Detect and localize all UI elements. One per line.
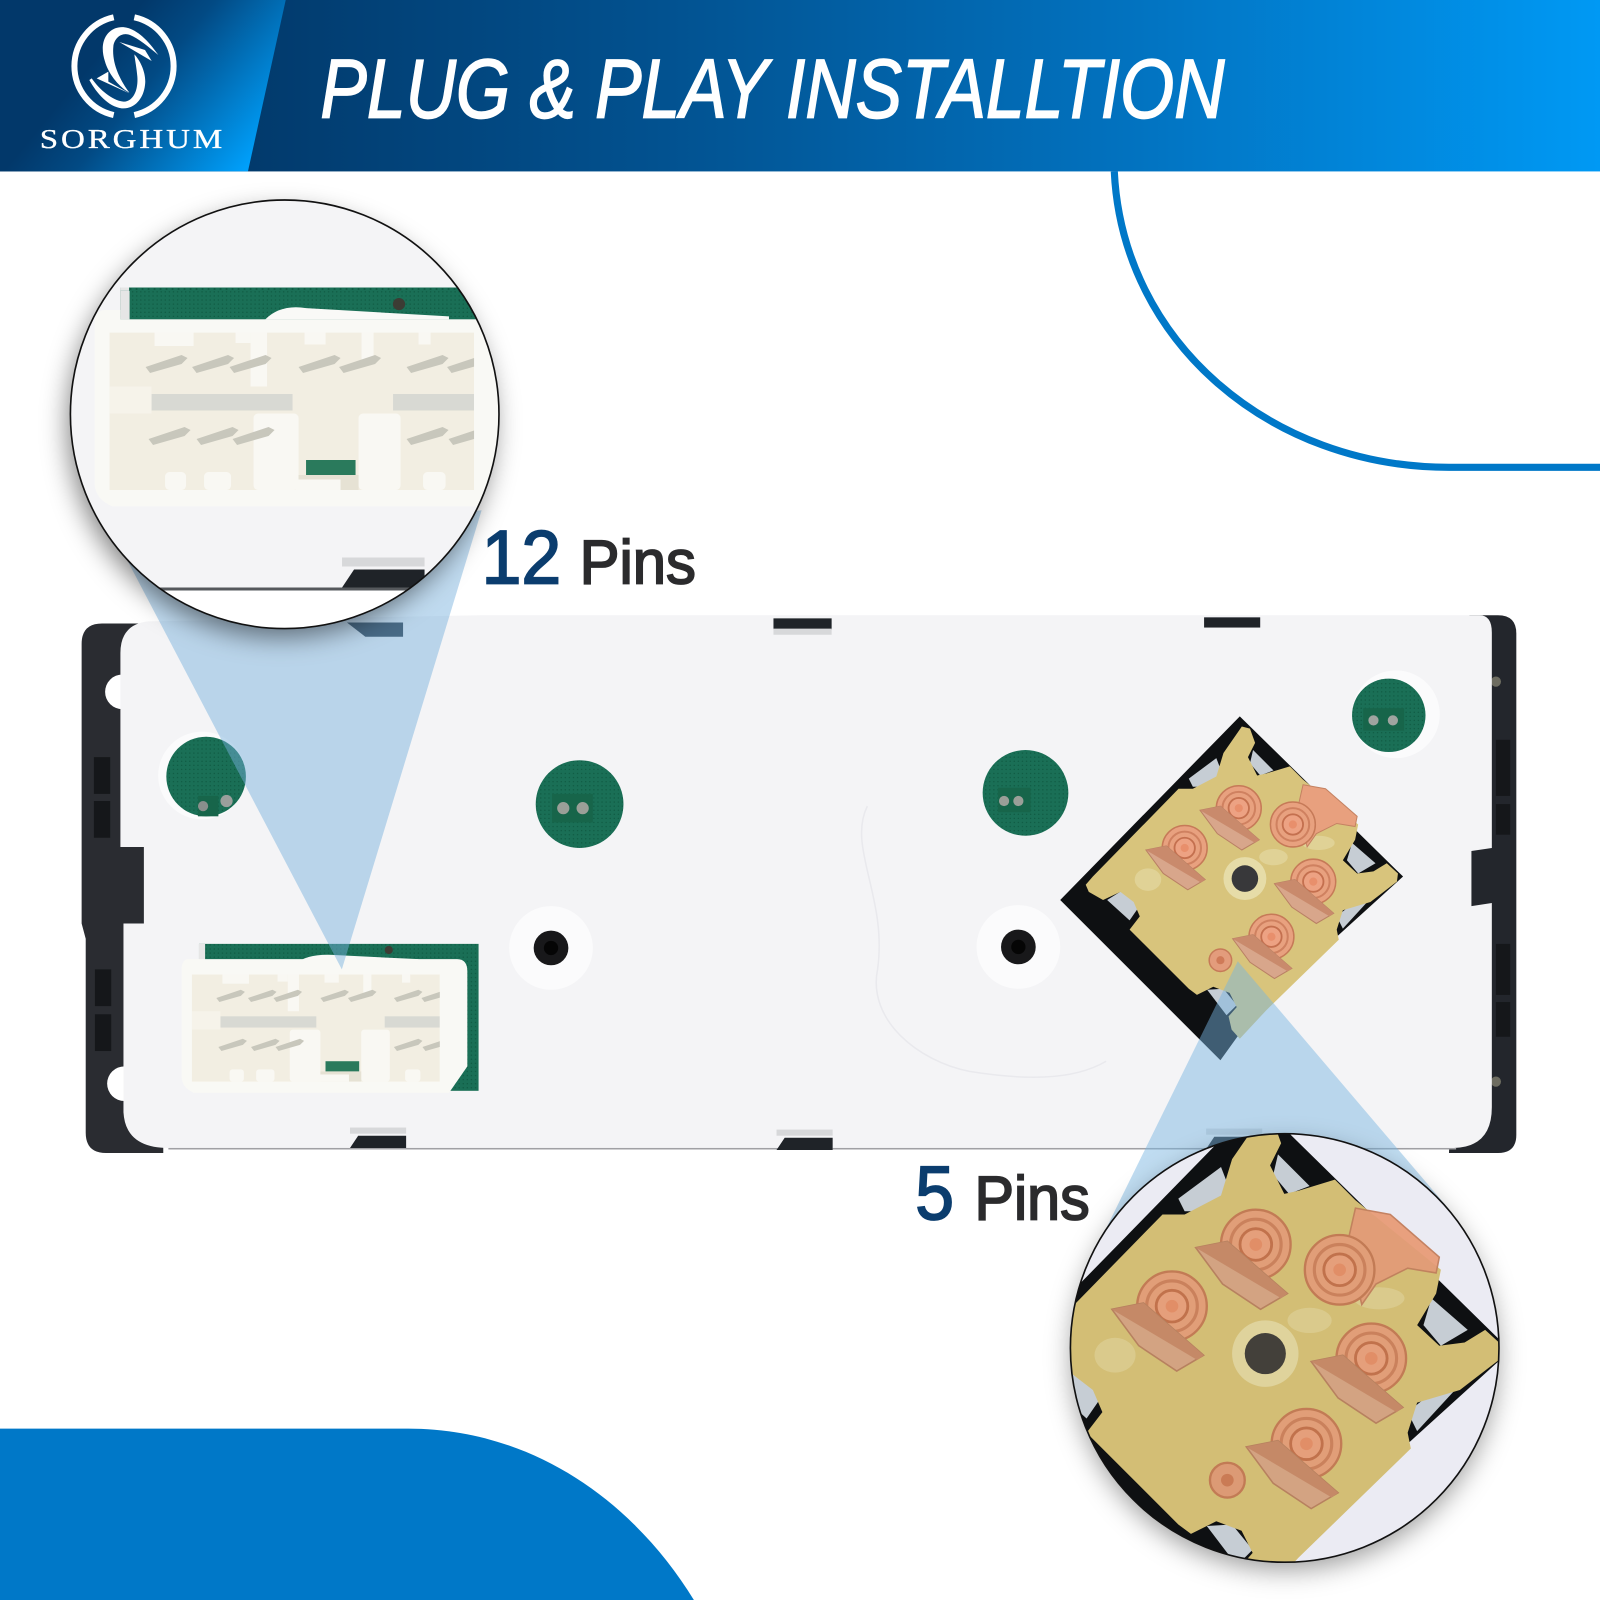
- logo panel: [0, 0, 286, 171]
- label: 12 pins: Pins: [580, 529, 696, 598]
- circle shadow left: [68, 212, 493, 637]
- label: 5 pins: Pins: [974, 1164, 1090, 1233]
- decorative corner arc: [1114, 171, 1600, 467]
- enlarged PCB strip: [120, 290, 476, 320]
- header banner: [0, 0, 1600, 171]
- label: 12 pins: 12: [482, 516, 561, 601]
- label: 5 pins: [915, 1151, 1090, 1236]
- title: PLUG & PLAY INSTALLTION: [320, 41, 1225, 135]
- 12-pin connector: [182, 944, 479, 1093]
- callout beam: 5 pins: [1102, 961, 1449, 1237]
- zoom circle: 12-pin connector detail: [70, 199, 500, 630]
- logo wordmark: SORGHUM: [40, 124, 222, 154]
- screw hole left: [509, 906, 593, 990]
- PCB window 3: [983, 750, 1068, 836]
- white panel: [120, 615, 1492, 1148]
- PCB window left: [158, 732, 246, 819]
- icon: sorghum logo mark: [74, 17, 174, 115]
- top and bottom clips: [347, 617, 1262, 1150]
- PCB window 2: [536, 760, 623, 848]
- label: 12 pins: [482, 516, 696, 601]
- PCB window 4: [1352, 670, 1440, 758]
- bottom-left blue shape: [0, 1429, 694, 1600]
- zoom circle: 5-pin contact detail: [1070, 1132, 1500, 1563]
- circle shadow right: [1072, 1145, 1497, 1569]
- label: 5 pins: 5: [915, 1151, 954, 1236]
- black side frame: [82, 623, 163, 1153]
- 5-pin rotary switch back: [1060, 716, 1403, 1060]
- callout beam: 12 pins: [122, 510, 482, 969]
- screw hole right: [977, 905, 1060, 989]
- product: switch rear view: [82, 615, 1516, 1153]
